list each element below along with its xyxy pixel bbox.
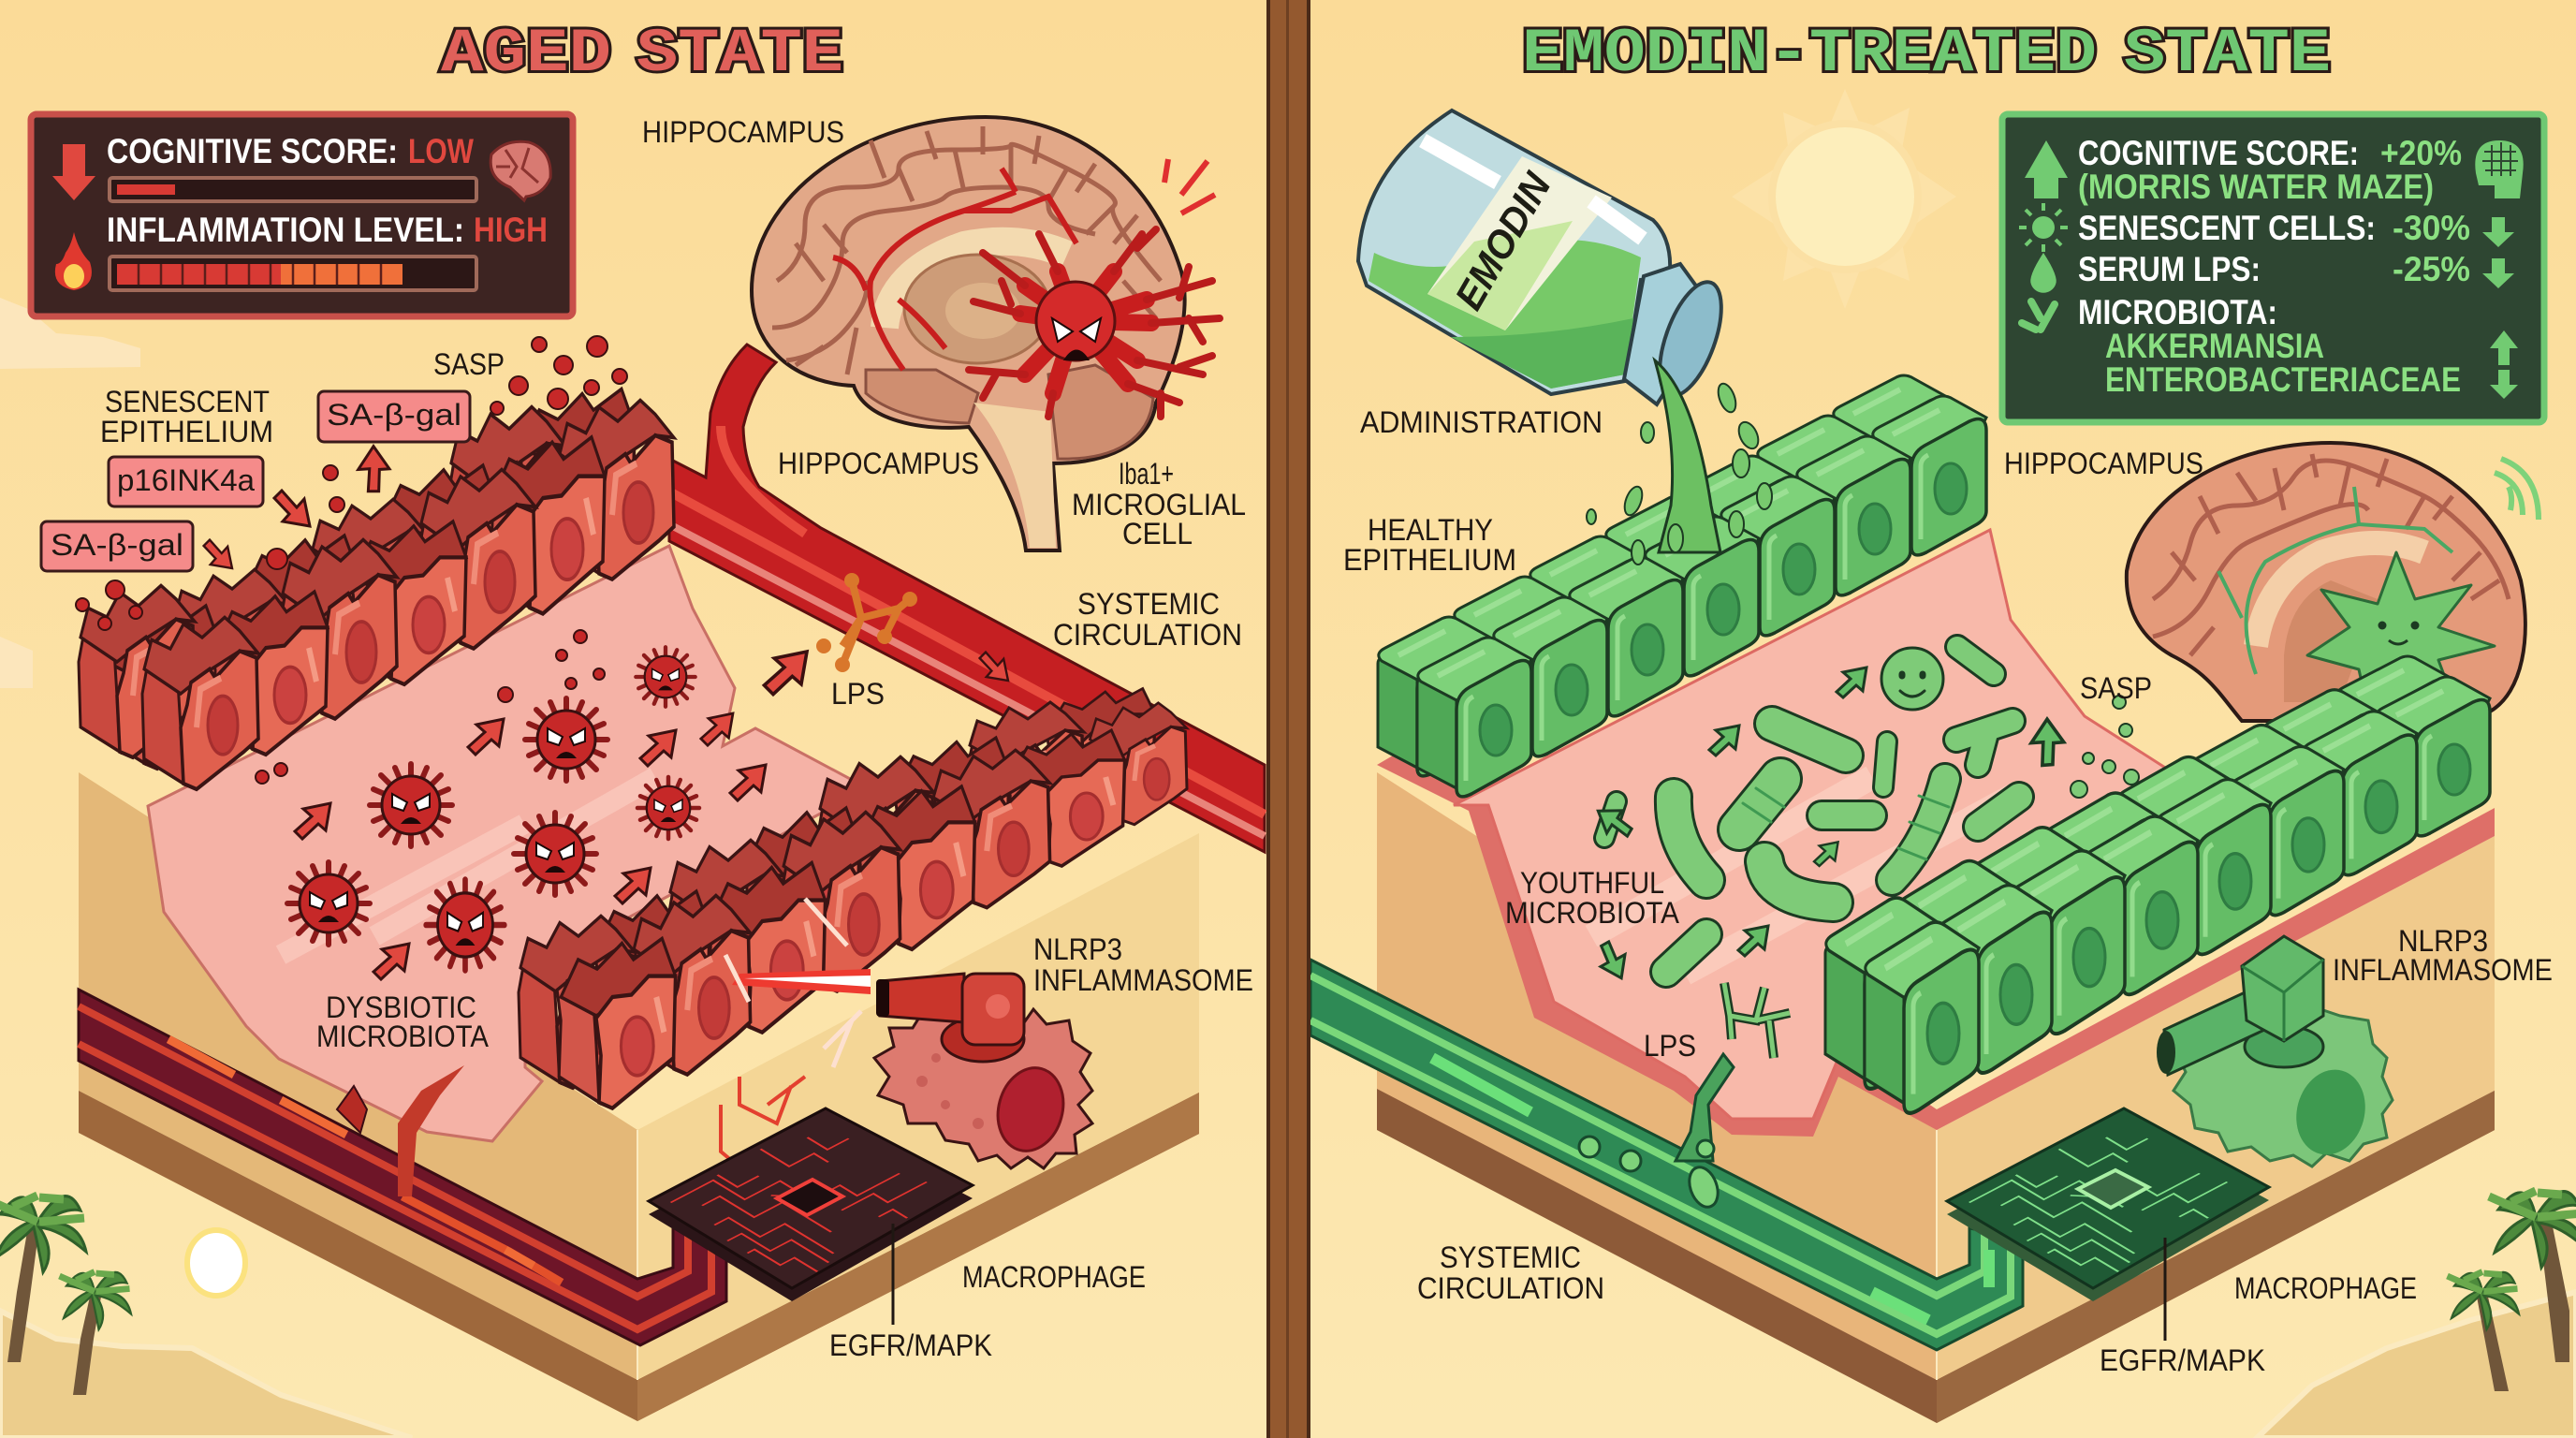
bottle label text: EMODIN (1446, 164, 1560, 316)
front epithelium row: senescent (519, 689, 1187, 1108)
alert marks (1164, 159, 1215, 213)
text: morris water maze: (MORRIS WATER MAZE) (2078, 168, 2434, 206)
icon: down arrow (52, 144, 95, 200)
leader line: EGFR/MAPK treated (2164, 1238, 2166, 1341)
block: left soil face (1377, 772, 1937, 1380)
labels: aged state: EGFR/MAPK (829, 1328, 992, 1362)
SASP particles (76, 336, 627, 784)
icon: brain (490, 141, 550, 200)
labels: aged state: CIRCULATION (1053, 618, 1242, 652)
icon: bacteria (2022, 301, 2055, 330)
text: senescent cells: SENESCENT CELLS: (2078, 209, 2376, 247)
label pill: p16INK4a (109, 457, 263, 506)
labels: aged state: HIPPOCAMPUS (778, 447, 979, 480)
circuit board: EGFR/MAPK treated (1947, 1108, 2269, 1301)
text: microbiota: MICROBIOTA: (2078, 293, 2277, 331)
labels: aged state: NLRP3 (1033, 932, 1122, 966)
icon: NLRP3 cannon treated (2157, 936, 2323, 1075)
icon: arrow down (2482, 217, 2514, 247)
palm trees right (2447, 1191, 2576, 1391)
text: high: HIGH (474, 211, 548, 249)
label pill: SA-β-gal top: SA-β-gal (327, 398, 461, 432)
text: -30%: -30% (2393, 209, 2470, 247)
labels: aged state: EPITHELIUM (100, 415, 273, 448)
labels: aged state: SYSTEMIC (1077, 587, 1220, 621)
icon: Iba1+ microglial cell (969, 229, 1220, 417)
title: emodin-treated state: STATE (2124, 19, 2331, 89)
dunes left (0, 1311, 412, 1438)
icon: arrow down (2490, 370, 2518, 399)
panel: aged isometric block (79, 345, 1265, 1421)
labels: treated state: SASP (2080, 671, 2152, 705)
text: akkermansia: AKKERMANSIA (2105, 327, 2324, 365)
center divider (1266, 0, 1310, 1438)
labels: aged state: CELL (1122, 517, 1193, 550)
bar: inflammation level (110, 257, 476, 290)
title: aged state: AGED (441, 19, 611, 89)
dunes right (2257, 1292, 2576, 1438)
signal waves (2495, 459, 2539, 520)
labels: treated state: EGFR/MAPK (2100, 1343, 2265, 1377)
icon: flame (55, 232, 92, 290)
icon: drop (2030, 253, 2056, 293)
circulating particles (1579, 1137, 1723, 1211)
title: aged state (441, 19, 843, 89)
text: -25%: -25% (2393, 250, 2470, 288)
icon: arrow down (2482, 258, 2514, 288)
labels: treated state: NLRP3 (2398, 924, 2488, 958)
labels: treated state: MACROPHAGE (2234, 1271, 2417, 1305)
bar: cognitive score (110, 178, 476, 201)
brain: treated (2127, 443, 2525, 721)
circulation vessel (1310, 960, 2023, 1350)
emodin pour stream (1587, 360, 1772, 565)
labels: aged state: DYSBIOTIC (326, 990, 476, 1024)
labels: treated state: LPS (1644, 1029, 1696, 1063)
labels: aged state: SASP (433, 347, 505, 381)
leader line: EGFR/MAPK (891, 1224, 895, 1325)
label pill: p16INK4a: p16INK4a (117, 463, 255, 497)
labels: aged state: HIPPOCAMPUS (642, 115, 844, 149)
lumen rim (1377, 749, 2495, 1137)
status panel: aged (31, 114, 573, 316)
labels: aged state: MICROBIOTA (316, 1020, 490, 1053)
icon: up arrow (2025, 140, 2068, 198)
macrophage: aged (874, 1009, 1092, 1168)
text: inflammation level: INFLAMMATION LEVEL: (107, 211, 464, 249)
labels: treated state: SYSTEMIC (1440, 1240, 1581, 1274)
circulation vessel (79, 990, 726, 1345)
labels: treated state: CIRCULATION (1417, 1271, 1604, 1305)
clouds left (0, 298, 140, 688)
palm trees left (0, 1196, 131, 1395)
lumen floor (1454, 530, 2183, 1119)
inflammatory arrows (204, 447, 1008, 979)
icon: NLRP3 cannon (876, 974, 1024, 1062)
labels: treated state: HIPPOCAMPUS (2004, 447, 2203, 480)
label pill: SA-β-gal left: SA-β-gal (51, 528, 183, 562)
green arrows (1593, 668, 2072, 978)
LPS leak stream (1676, 1054, 1734, 1161)
text: enterobacteriaceae: ENTEROBACTERIACEAE (2105, 360, 2461, 399)
back epithelium row: senescent (79, 389, 674, 789)
energy beam (725, 899, 871, 1067)
text: low: LOW (408, 132, 474, 170)
dysbiotic microbiota (287, 647, 699, 970)
lumen floor (148, 546, 854, 1141)
icon: sun cell (2019, 203, 2068, 252)
block: right soil face (1937, 836, 2495, 1380)
text: cognitive score: COGNITIVE SCORE: (107, 132, 398, 170)
labels: aged state: MACROPHAGE (962, 1260, 1146, 1294)
block: bottom strip (79, 1091, 1199, 1421)
labels: treated state: MICROBIOTA (1505, 896, 1680, 930)
signal traces (721, 1077, 805, 1208)
icon: arrow up (2490, 330, 2518, 365)
text: serum lps: SERUM LPS: (2078, 250, 2261, 288)
front epithelium row: healthy (1825, 656, 2490, 1113)
back epithelium row: healthy (1378, 375, 1986, 797)
youthful microbiota (1604, 647, 2019, 972)
bottle neck (1624, 264, 1715, 404)
labels: treated state: ADMINISTRATION (1360, 405, 1603, 439)
block: bottom strip (1377, 1089, 2495, 1423)
icon: head (2475, 140, 2524, 198)
panel: treated isometric block (1310, 530, 2495, 1423)
labels: aged state: LPS (831, 677, 885, 711)
labels: aged state: Iba1+ (1119, 457, 1174, 491)
labels: treated state: EPITHELIUM (1343, 543, 1516, 577)
title: emodin-treated state: EMODIN-TREATED (1522, 19, 2097, 89)
text: cognitive delta: +20% (2380, 134, 2462, 172)
sun left (187, 1230, 245, 1296)
label pill: SA-β-gal left (41, 521, 193, 571)
label pill: SA-β-gal top (318, 391, 470, 442)
title: aged state: STATE (637, 19, 843, 89)
LPS molecule right (1724, 983, 1790, 1058)
title: emodin-treated state (1522, 19, 2331, 89)
labels: treated state (1343, 405, 2553, 1377)
labels: aged state: INFLAMMASOME (1033, 963, 1253, 997)
labels: treated state: HEALTHY (1368, 513, 1493, 547)
labels: treated state: YOUTHFUL (1520, 866, 1664, 900)
circuit board: EGFR/MAPK aged (649, 1108, 973, 1301)
labels: aged state: SENESCENT (105, 385, 270, 418)
artery: main band (669, 345, 1265, 852)
bottle: emodin (1358, 110, 1734, 404)
labels: aged state: MICROGLIAL (1072, 488, 1246, 521)
labels: treated state: INFLAMMASOME (2333, 953, 2553, 987)
SASP particles: treated (2071, 696, 2139, 798)
brain: aged (752, 117, 1185, 550)
sun right (1732, 89, 1956, 309)
LPS molecule left (820, 577, 914, 668)
status panel: treated (2002, 114, 2544, 422)
block: right soil face (637, 833, 1199, 1380)
icon: healthy microglial cell (2307, 552, 2495, 712)
block: left soil face (79, 772, 637, 1380)
macrophage: treated (2174, 1006, 2393, 1167)
labels: aged state (100, 115, 1253, 1362)
text: cognitive score: COGNITIVE SCORE: (2078, 134, 2359, 172)
